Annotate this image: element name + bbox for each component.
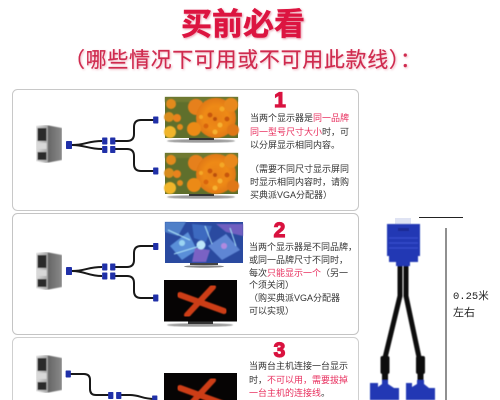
bottom right connector bbox=[406, 380, 435, 400]
illustration: VGA splitter cable bbox=[370, 218, 435, 400]
dimension label: 0.25米 bbox=[453, 289, 489, 303]
text: case 2 description: 每次只能显示一个（另一 bbox=[249, 268, 348, 278]
number 1: 1 bbox=[274, 89, 286, 112]
text: case 1 description: 当两个显示器是同一品牌 bbox=[250, 113, 349, 123]
text: case 1 note: 时显示相同内容时，请购 bbox=[250, 176, 349, 187]
icon: computer tower bbox=[36, 355, 62, 393]
number 2: 2 bbox=[274, 219, 285, 242]
dimension line bbox=[419, 218, 463, 400]
icon: computer tower bbox=[36, 125, 62, 163]
text: case 2 description: 当两个显示器是不同品牌， bbox=[249, 241, 357, 252]
blue hood bbox=[387, 224, 420, 266]
text: case 3 description: 一台主机的连接线。 bbox=[249, 388, 330, 398]
cable diagram bbox=[66, 116, 158, 174]
text: case 1 note: 买典派VGA分配器） bbox=[250, 189, 332, 200]
monitor: flowers top bbox=[164, 97, 239, 143]
cable diagram bbox=[66, 243, 158, 302]
monitor: crossed out bbox=[164, 373, 237, 400]
connector pins bbox=[395, 218, 411, 224]
text: case 2 note: 可以实现） bbox=[249, 305, 294, 316]
black cables bbox=[384, 264, 420, 362]
text: case 1 description: 同一型号尺寸大小时，可 bbox=[250, 127, 349, 137]
panel: case 2 bbox=[12, 214, 358, 334]
text: case 2 description: 或同一品牌尺寸不同时， bbox=[249, 254, 348, 265]
text: case 3 description: 当两台主机连接一台显示 bbox=[249, 360, 348, 371]
text: case 2 note: （购买典派VGA分配器 bbox=[249, 292, 340, 303]
dimension label: 左右 bbox=[453, 305, 475, 319]
text: case 2 description: 个须关闭） bbox=[249, 279, 294, 290]
monitor: crossed out bbox=[164, 280, 237, 327]
subtitle: （哪些情况下可用或不可用此款线）： bbox=[64, 49, 421, 72]
text: case 1 description: 以分屏显示相同内容。 bbox=[250, 139, 340, 150]
cable diagram bbox=[66, 370, 157, 400]
monitor: blue flowers bbox=[165, 222, 243, 268]
title: 买前必看 bbox=[181, 7, 305, 42]
bottom left connector bbox=[370, 380, 399, 400]
panel: case 3 bbox=[12, 338, 358, 400]
icon: computer tower bbox=[36, 252, 62, 290]
text: case 3 description: 时，不可以用，需要拔掉 bbox=[249, 375, 348, 385]
panel: case 1 bbox=[12, 89, 358, 210]
number 3: 3 bbox=[274, 339, 285, 362]
text: case 1 note: （需要不同尺寸显示屏同 bbox=[250, 163, 349, 174]
monitor: flowers bottom bbox=[164, 153, 239, 199]
